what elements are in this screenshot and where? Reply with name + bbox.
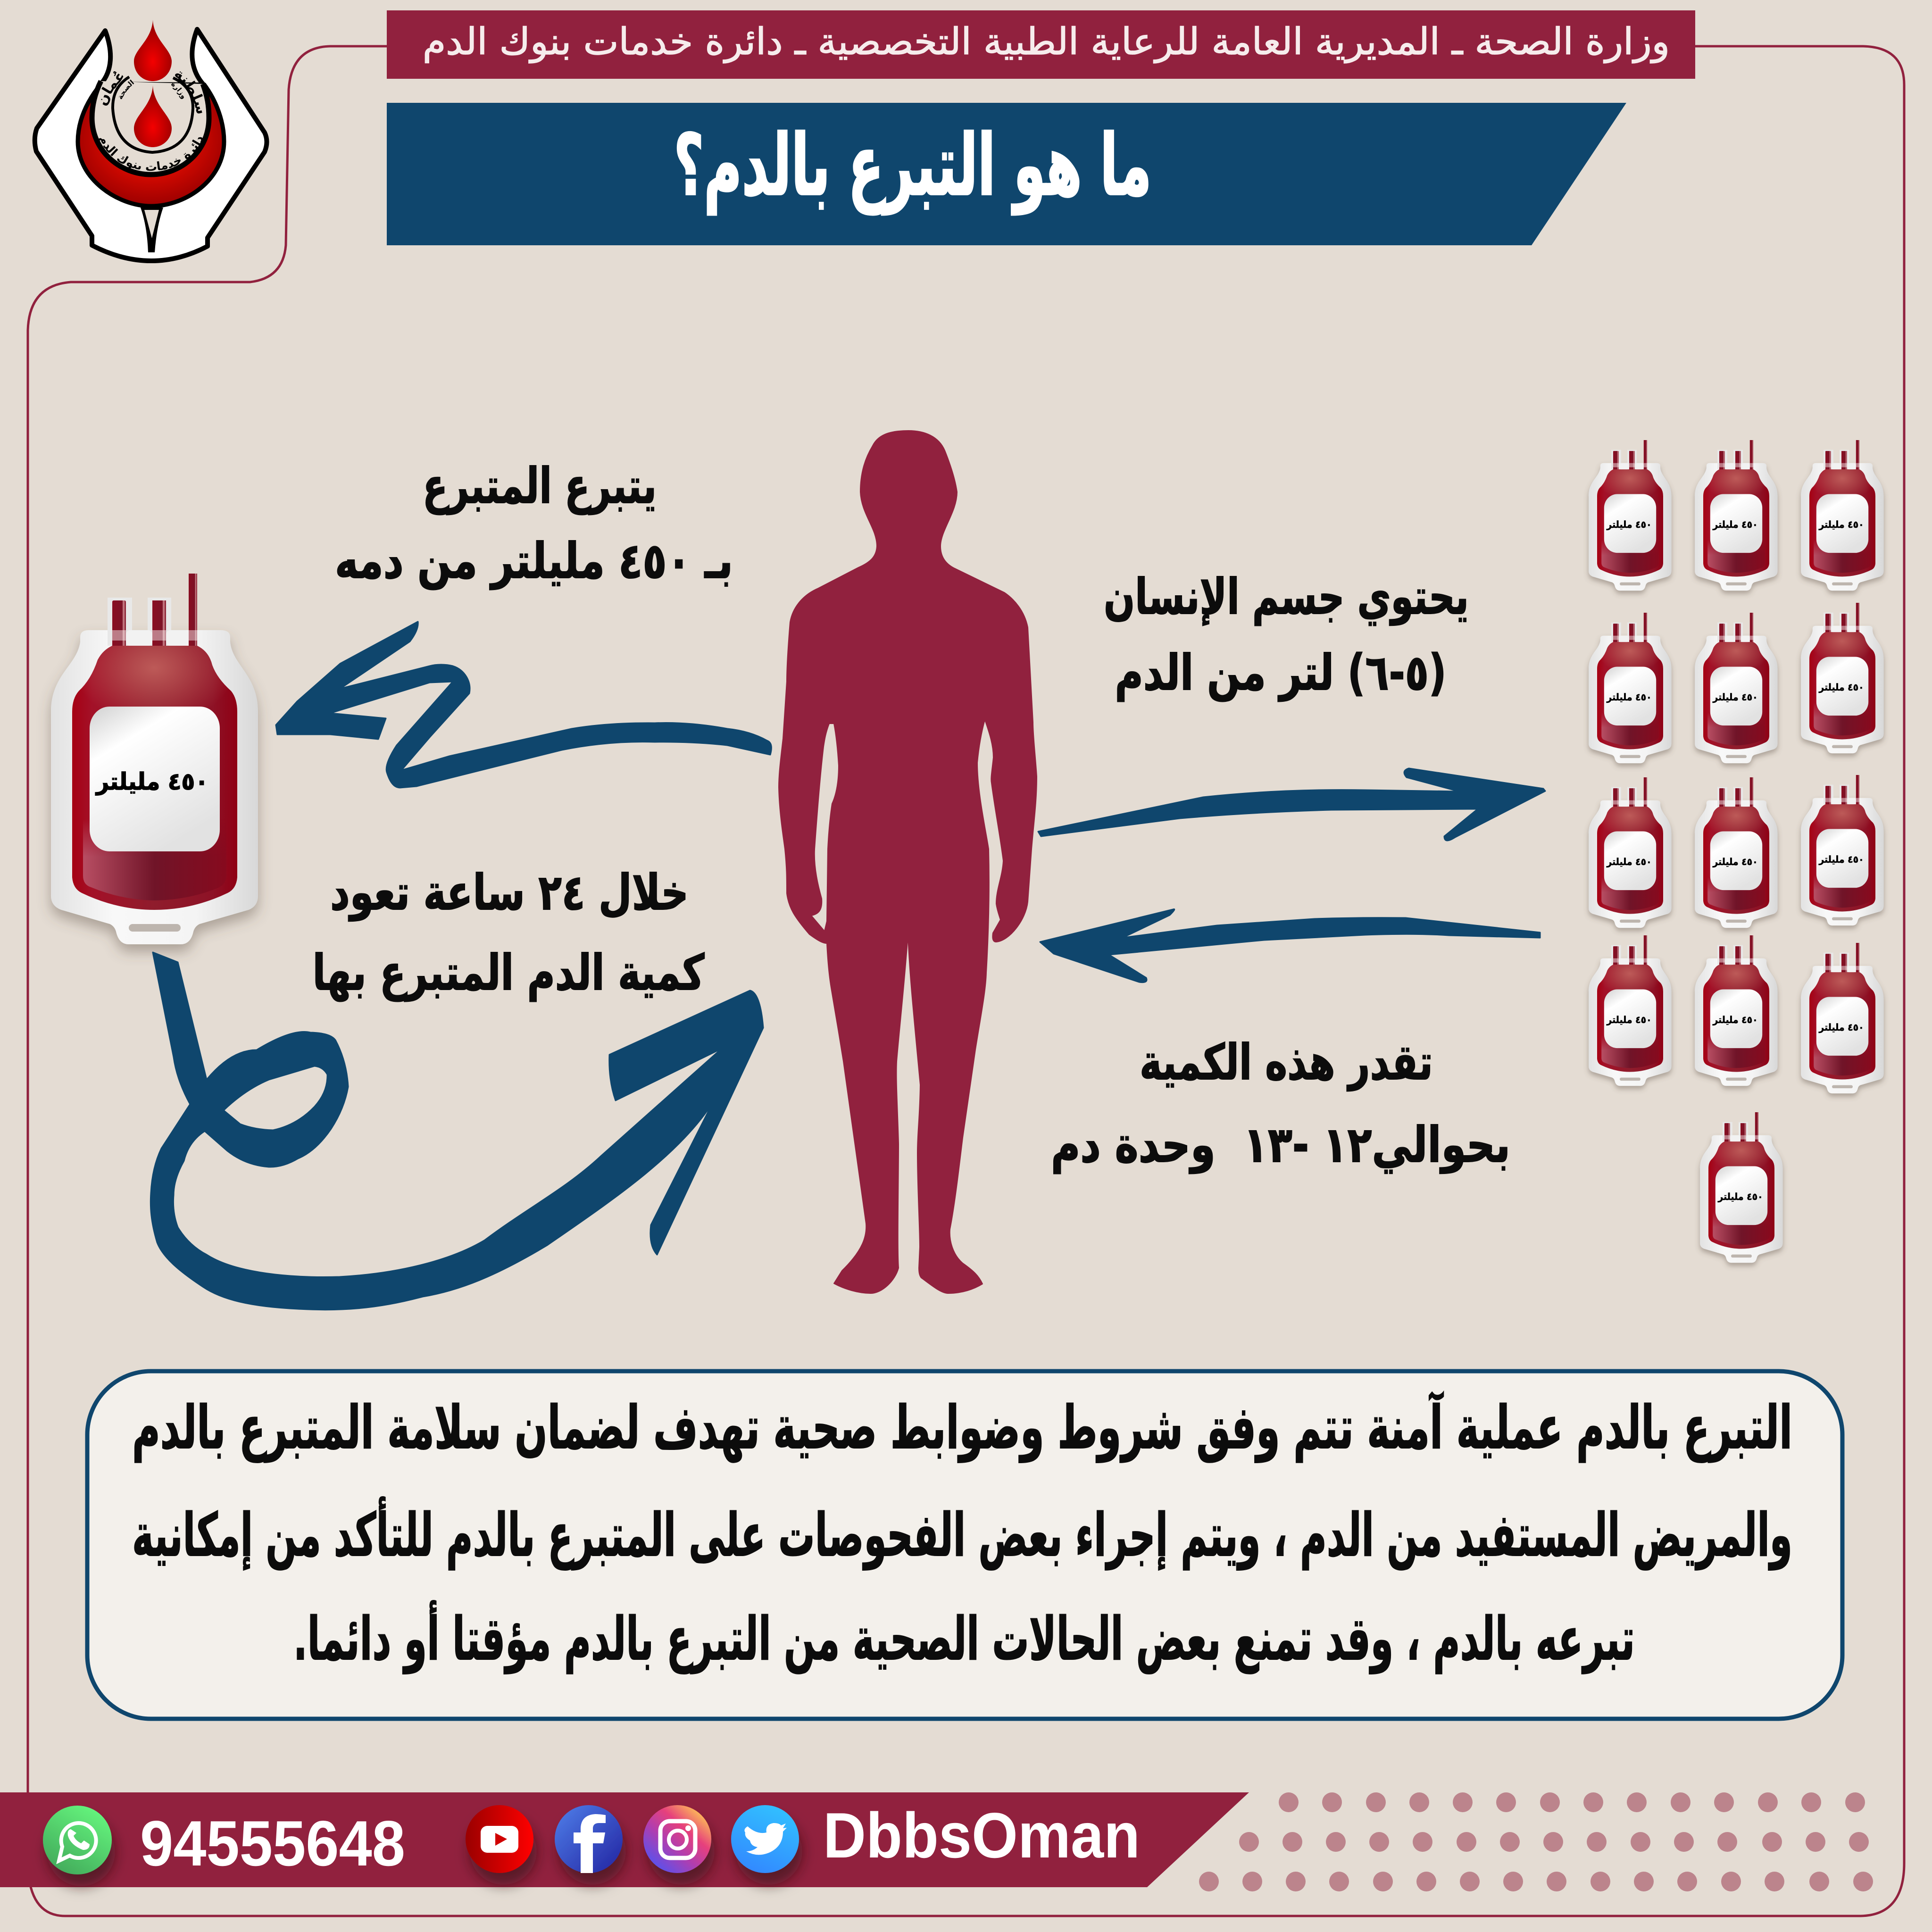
icon: facebook [555, 1805, 623, 1873]
blood unit 9: ٤٥٠ مليلتر [1818, 854, 1864, 865]
human silhouette [779, 431, 1037, 1293]
blood unit 4: ٤٥٠ مليلتر [1606, 691, 1652, 703]
footer bar [0, 1792, 1249, 1887]
title banner [387, 103, 1626, 245]
blood unit 13 [1700, 1112, 1783, 1263]
icon: whatsapp [43, 1806, 112, 1874]
donor text: يتبرع المتبرع [423, 457, 657, 515]
arrow: body to units [1038, 768, 1545, 841]
blood unit 9 [1801, 775, 1884, 925]
social handle: DbbsOman [823, 1799, 1140, 1871]
blood units grid [1589, 440, 1884, 1263]
blood unit 7: ٤٥٠ مليلتر [1606, 856, 1652, 867]
header ministry banner [387, 10, 1695, 79]
icon: youtube [466, 1805, 533, 1873]
human body text [1104, 568, 1469, 701]
units text: تقدر هذه الكمية [1140, 1033, 1433, 1091]
icon: twitter [731, 1805, 799, 1873]
blood unit 7 [1589, 777, 1672, 928]
human body text: يحتوي جسم الإنسان [1104, 568, 1469, 626]
blood bag large [51, 574, 258, 944]
blood unit 8 [1695, 777, 1778, 928]
blood bag label: ٤٥٠ مليلتر [95, 768, 208, 796]
arrow: donor to blood bag [276, 622, 771, 788]
blood unit 8: ٤٥٠ مليلتر [1712, 856, 1758, 867]
blood unit 2 [1695, 440, 1778, 591]
blood unit 1 [1589, 440, 1672, 591]
logo curved text: وزارة [169, 80, 188, 100]
blood unit 3: ٤٥٠ مليلتر [1818, 519, 1864, 530]
blood unit 13: ٤٥٠ مليلتر [1717, 1191, 1763, 1202]
blood unit 10 [1589, 935, 1672, 1086]
logo [35, 20, 266, 261]
blood unit 3 [1801, 440, 1884, 591]
blood unit 11 [1695, 935, 1778, 1086]
blood unit 11: ٤٥٠ مليلتر [1712, 1014, 1758, 1025]
info panel paragraph [132, 1391, 1792, 1674]
icon: instagram [643, 1805, 711, 1873]
blood unit 6: ٤٥٠ مليلتر [1818, 682, 1864, 693]
logo curved text: الصحة [116, 78, 136, 101]
recovery text [312, 864, 705, 1001]
blood unit 2: ٤٥٠ مليلتر [1712, 519, 1758, 530]
blood unit 1: ٤٥٠ مليلتر [1606, 519, 1652, 530]
recovery text: خلال ٢٤ ساعة تعود [330, 864, 689, 921]
recovery text: كمية الدم المتبرع بها [312, 944, 705, 1001]
blood unit 10: ٤٥٠ مليلتر [1606, 1014, 1652, 1025]
phone number: 94555648 [140, 1807, 405, 1879]
icon: logo blood drops [134, 20, 172, 147]
logo curved text: عُمان [93, 67, 128, 108]
blood unit 12: ٤٥٠ مليلتر [1818, 1022, 1864, 1033]
donor text: بـ ٤٥٠ مليلتر من دمه [335, 532, 733, 590]
header ministry banner: وزارة الصحة ـ المديرية العامة للرعاية الطبية التخصصية ـ دائرة خدمات بنوك الدم [423, 21, 1670, 64]
arrow: units to body [1040, 909, 1540, 983]
blood unit 6 [1801, 603, 1884, 753]
logo curved text: دائرة خدمات بنوك الدم [96, 133, 207, 174]
blood unit 5 [1695, 613, 1778, 763]
title banner: ما هو التبرع بالدم؟ [674, 117, 1152, 215]
blood unit 4 [1589, 613, 1672, 763]
info panel [87, 1371, 1842, 1719]
logo curved text [93, 66, 210, 174]
logo curved text: سلطنة [171, 66, 210, 116]
donor text [335, 457, 733, 590]
human body text: (٥-٦) لتر من الدم [1115, 644, 1446, 701]
units text: بحوالي١٢ -١٣ وحدة دم [1051, 1116, 1510, 1174]
arrow: blood bag back to body [150, 952, 763, 1310]
blood unit 12 [1801, 943, 1884, 1093]
blood unit 5: ٤٥٠ مليلتر [1712, 691, 1758, 703]
footer dots [1199, 1792, 1873, 1891]
units text [1051, 1033, 1510, 1174]
